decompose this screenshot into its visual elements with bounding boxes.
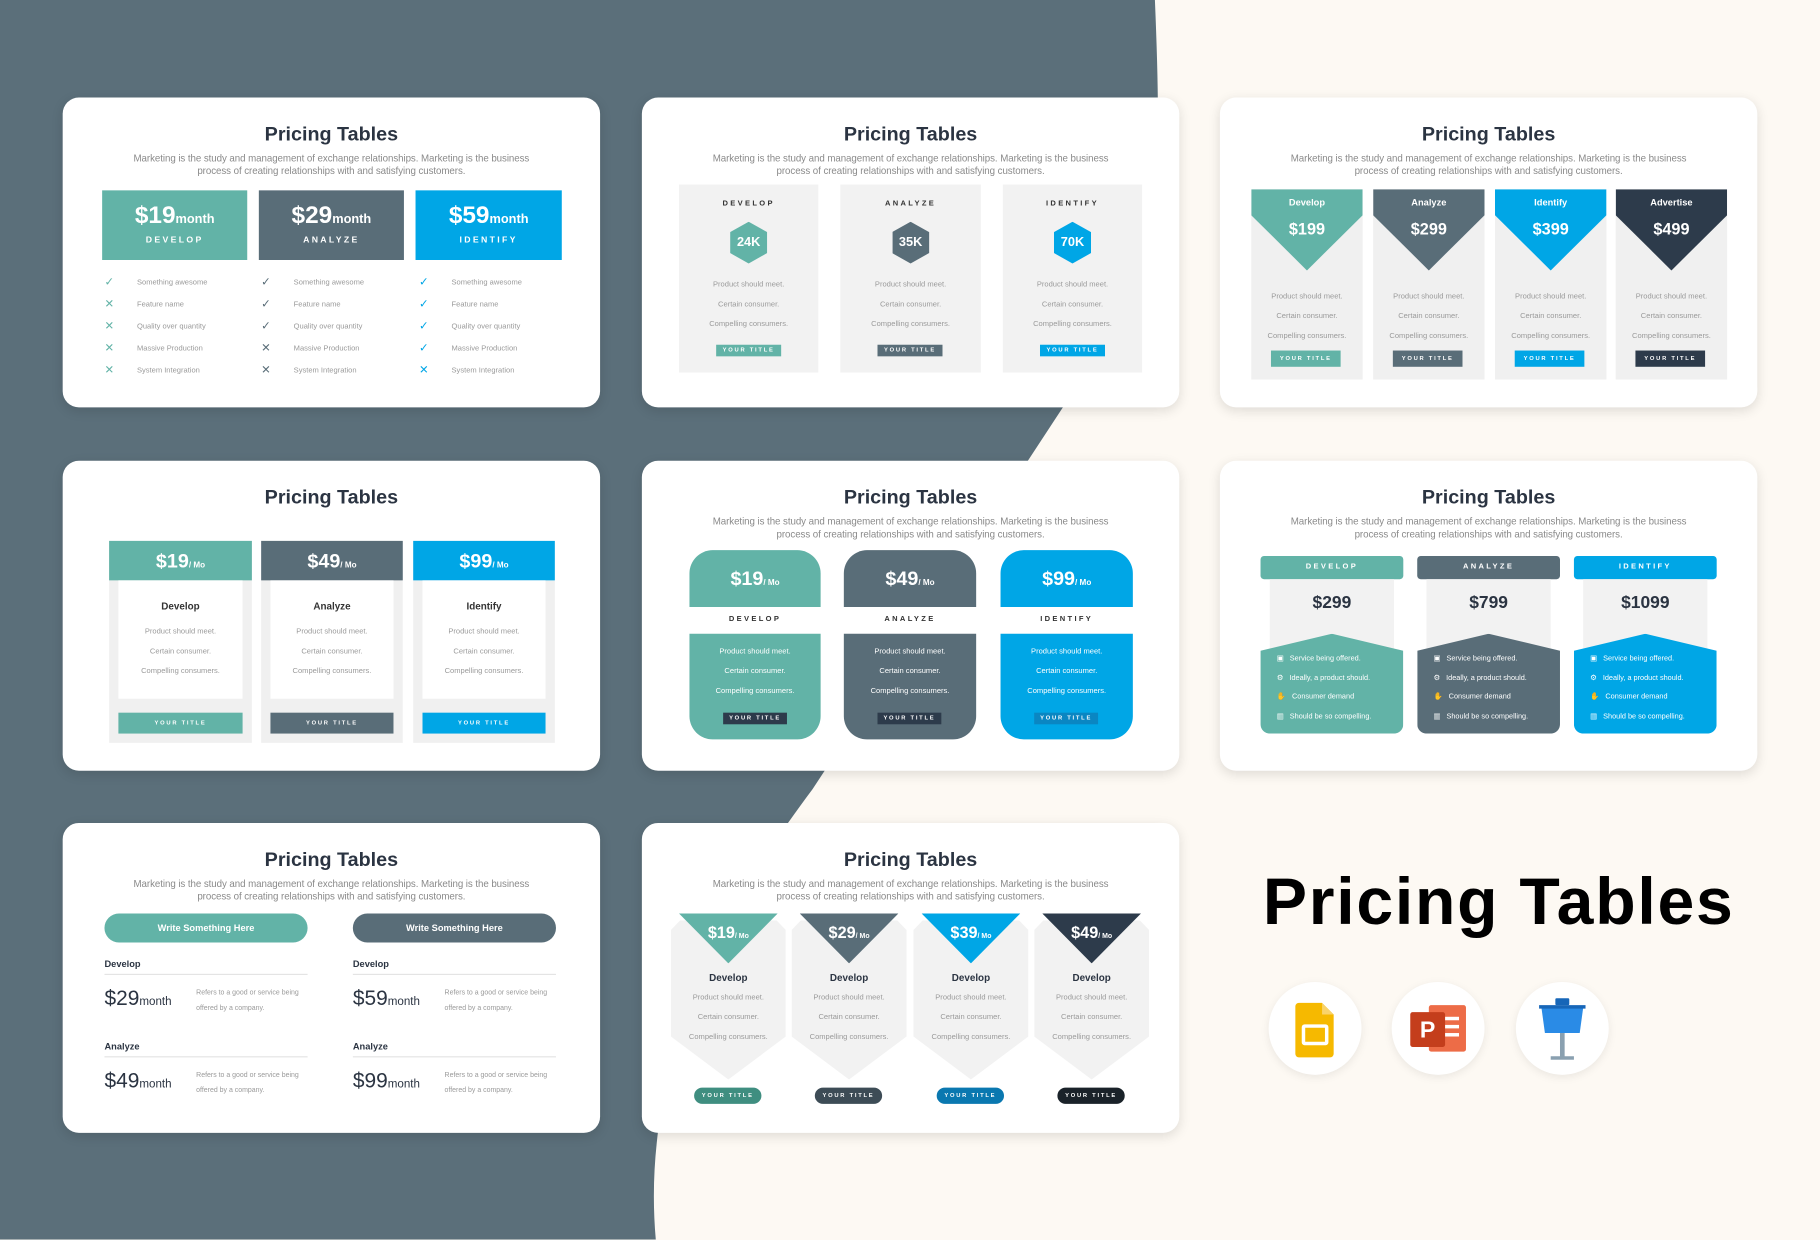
- subtitle: Marketing is the study and management of exchange relationships. Marketing is the business: [134, 152, 529, 164]
- box develop: [102, 190, 247, 260]
- pill left: Write Something Here: [158, 923, 254, 933]
- column develop: ⚙ Ideally, a product should.: [1277, 674, 1370, 682]
- column 4: Develop: [1072, 972, 1111, 983]
- column develop: Certain consumer.: [724, 667, 786, 676]
- column analyze: [1417, 556, 1560, 734]
- panel: card 1: ✓: [261, 276, 271, 289]
- column develop: Product should meet.: [719, 648, 791, 656]
- panel: card 1: ✕: [104, 298, 114, 311]
- panel: card 7: $99month: [353, 1069, 420, 1092]
- column develop: YOUR TITLE: [723, 347, 775, 354]
- column 4: [1034, 914, 1149, 1104]
- column identify: IDENTIFY: [1046, 200, 1099, 208]
- subtitle: [713, 877, 1108, 902]
- column develop: ▥ Should be so compelling.: [1277, 712, 1371, 720]
- panel: card 1: ✓: [261, 320, 271, 333]
- column advertise: Certain consumer.: [1641, 312, 1702, 320]
- panel: card 7: $29month: [104, 987, 172, 1010]
- subtitle: Marketing is the study and management of exchange relationships. Marketing is the business: [713, 152, 1108, 164]
- column identify: IDENTIFY: [1619, 563, 1672, 571]
- column identify: YOUR TITLE: [1047, 347, 1098, 354]
- panel: card 5: [642, 461, 1179, 771]
- subtitle: Marketing is the study and management of exchange relationships. Marketing is the business: [1291, 152, 1686, 164]
- column analyze: $49/ Mo: [307, 550, 357, 572]
- column develop: $299: [1313, 593, 1351, 613]
- panel: card 7: offered by a company.: [445, 1005, 513, 1012]
- column analyze: ANALYZE: [1463, 563, 1514, 571]
- column analyze: Certain consumer.: [1398, 312, 1459, 320]
- column identify: Compelling consumers.: [1033, 320, 1112, 328]
- column analyze: YOUR TITLE: [884, 347, 936, 354]
- panel: card 1: Feature name: [294, 301, 341, 309]
- subtitle: [713, 515, 1108, 540]
- column develop: [1260, 556, 1404, 734]
- column analyze: YOUR TITLE: [883, 715, 935, 722]
- left list: [104, 959, 308, 1095]
- column develop: Compelling consumers.: [1268, 332, 1346, 340]
- heading: Pricing Tables: [844, 848, 977, 871]
- column 3: $39/ Mo: [950, 923, 991, 941]
- main title: Pricing Tables: [1263, 865, 1735, 939]
- subtitle: process of creating relationships with and satisfying customers.: [1355, 528, 1623, 539]
- panel: card 1: ✓: [419, 276, 429, 289]
- panel: card 1: ✕: [261, 342, 271, 355]
- panel: card 1: Quality over quantity: [137, 323, 206, 331]
- column identify: Compelling consumers.: [1027, 687, 1106, 695]
- column develop: Certain consumer.: [718, 301, 779, 309]
- panel: card 1: Massive Production: [294, 345, 360, 353]
- subtitle: process of creating relationships with and satisfying customers.: [777, 528, 1045, 539]
- column identify: IDENTIFY: [1040, 615, 1093, 623]
- icon: keynote: [1516, 982, 1609, 1075]
- heading: Pricing Tables: [844, 486, 977, 508]
- subtitle: Marketing is the study and management of exchange relationships. Marketing is the business: [713, 877, 1108, 889]
- column analyze: 35K: [899, 236, 922, 250]
- pill right: [353, 913, 556, 942]
- box analyze: [259, 190, 404, 260]
- box identify: [416, 190, 562, 260]
- column identify: Certain consumer.: [1520, 312, 1581, 320]
- column analyze: ANALYZE: [885, 200, 936, 208]
- column develop: Product should meet.: [1271, 292, 1343, 301]
- column analyze: Certain consumer.: [301, 648, 363, 656]
- panel: card 1: Quality over quantity: [294, 323, 362, 331]
- column 1: Compelling consumers.: [689, 1033, 768, 1041]
- column 3: [914, 914, 1028, 1104]
- icon: powerpoint: P: [1420, 1017, 1435, 1043]
- column develop: Product should meet.: [145, 628, 216, 636]
- column 2: Compelling consumers.: [810, 1033, 888, 1041]
- column 1: YOUR TITLE: [702, 1092, 754, 1099]
- column identify: Product should meet.: [1031, 648, 1102, 656]
- column identify: $399: [1533, 219, 1569, 238]
- column advertise: $499: [1653, 219, 1690, 238]
- panel: card 1: Massive Production: [452, 345, 517, 353]
- panel: card 1: System Integration: [137, 367, 200, 375]
- right list: Develop: [353, 959, 389, 969]
- column 4: Compelling consumers.: [1052, 1033, 1131, 1041]
- column advertise: YOUR TITLE: [1644, 355, 1696, 362]
- column develop: [1251, 189, 1363, 380]
- column identify: Certain consumer.: [453, 648, 515, 656]
- column develop: Certain consumer.: [150, 648, 211, 656]
- panel: card 1: ✓: [419, 342, 429, 355]
- column analyze: [844, 550, 976, 740]
- column develop: DEVELOP: [729, 615, 781, 623]
- panel: card 7: Analyze: [353, 1041, 388, 1052]
- column identify: ✋ Consumer demand: [1590, 693, 1668, 701]
- subtitle: [713, 152, 1108, 176]
- column develop: YOUR TITLE: [155, 720, 206, 727]
- column identify: Product should meet.: [448, 628, 520, 636]
- column develop: 24K: [737, 236, 760, 250]
- column analyze: Compelling consumers.: [871, 687, 949, 695]
- panel: card 1: Something awesome: [137, 279, 207, 287]
- right list: [353, 959, 556, 1095]
- icon: powerpoint: [1392, 982, 1485, 1075]
- column 3: YOUR TITLE: [944, 1092, 996, 1099]
- column analyze: ▥ Should be so compelling.: [1433, 712, 1528, 720]
- panel: card 1: ✓: [419, 298, 429, 311]
- column analyze: Product should meet.: [875, 281, 946, 289]
- column identify: [1000, 550, 1133, 740]
- panel: card 8: [642, 823, 1179, 1133]
- column develop: Compelling consumers.: [709, 320, 788, 328]
- panel: card 1: ✓: [261, 298, 271, 311]
- panel: card 7: offered by a company.: [196, 1088, 264, 1095]
- box identify: IDENTIFY: [460, 234, 518, 245]
- column identify: $99/ Mo: [1042, 568, 1091, 590]
- panel: card 4: [63, 461, 600, 771]
- column 3: Product should meet.: [935, 994, 1007, 1002]
- column 2: [792, 914, 906, 1104]
- panel: card 7: Refers to a good or service being: [445, 1072, 547, 1079]
- column identify: [1003, 185, 1142, 373]
- column develop: $19/ Mo: [156, 550, 205, 572]
- column identify: Product should meet.: [1515, 292, 1586, 301]
- panel: card 2: [642, 97, 1179, 407]
- column 2: $29/ Mo: [829, 923, 870, 941]
- subtitle: Marketing is the study and management of exchange relationships. Marketing is the business: [1291, 515, 1686, 527]
- column 1: Product should meet.: [693, 994, 764, 1002]
- panel: card 1: System Integration: [452, 367, 514, 375]
- column identify: Identify: [466, 600, 502, 612]
- subtitle: process of creating relationships with and satisfying customers.: [197, 890, 465, 901]
- subtitle: Marketing is the study and management of exchange relationships. Marketing is the business: [134, 877, 529, 889]
- column develop: Compelling consumers.: [141, 667, 220, 676]
- panel: card 7: Refers to a good or service being: [445, 990, 547, 997]
- column analyze: [1373, 189, 1485, 380]
- column 3: Develop: [952, 972, 990, 983]
- column analyze: Analyze: [313, 600, 351, 612]
- panel: card 7: $49month: [104, 1069, 172, 1092]
- column analyze: Product should meet.: [296, 628, 368, 636]
- column advertise: Advertise: [1650, 197, 1693, 208]
- subtitle: [134, 152, 529, 176]
- column analyze: Analyze: [1411, 197, 1446, 208]
- column analyze: ✋ Consumer demand: [1433, 693, 1511, 701]
- pill left: [104, 913, 308, 942]
- column develop: Compelling consumers.: [716, 687, 794, 695]
- column advertise: Product should meet.: [1636, 292, 1707, 301]
- column identify: YOUR TITLE: [1040, 715, 1092, 722]
- icon: google slides: [1269, 982, 1362, 1075]
- subtitle: [134, 877, 529, 902]
- panel: card 1: ✕: [261, 364, 271, 377]
- subtitle: Marketing is the study and management of exchange relationships. Marketing is the business: [713, 515, 1108, 527]
- column develop: DEVELOP: [723, 200, 775, 208]
- column analyze: Product should meet.: [1393, 292, 1464, 301]
- column analyze: Compelling consumers.: [1389, 332, 1468, 340]
- heading: Pricing Tables: [265, 848, 398, 871]
- panel: card 1: ✕: [104, 364, 114, 377]
- panel: card 7: Refers to a good or service being: [196, 990, 299, 997]
- column analyze: $799: [1469, 593, 1508, 613]
- column develop: Develop: [1289, 197, 1325, 208]
- column analyze: YOUR TITLE: [306, 720, 358, 727]
- column develop: $19/ Mo: [730, 568, 780, 590]
- column analyze: YOUR TITLE: [1402, 355, 1454, 362]
- column 1: [671, 914, 786, 1104]
- column identify: [1574, 556, 1717, 734]
- box analyze: $29month: [292, 202, 371, 229]
- column develop: ✋ Consumer demand: [1277, 693, 1354, 701]
- column develop: YOUR TITLE: [1280, 355, 1332, 362]
- panel: card 3: [1220, 97, 1757, 407]
- column develop: Product should meet.: [713, 281, 784, 289]
- column analyze: Certain consumer.: [879, 667, 941, 676]
- column analyze: Certain consumer.: [880, 301, 941, 309]
- heading: Pricing Tables: [1422, 123, 1555, 145]
- subtitle: process of creating relationships with and satisfying customers.: [1355, 164, 1623, 176]
- panel: card 1: Feature name: [137, 301, 184, 309]
- panel: card 7: Analyze: [104, 1041, 140, 1052]
- column develop: DEVELOP: [1306, 563, 1358, 571]
- column identify: YOUR TITLE: [458, 720, 510, 727]
- heading: Pricing Tables: [1422, 486, 1555, 508]
- column identify: 70K: [1061, 236, 1084, 250]
- column identify: [1495, 189, 1606, 380]
- column 2: YOUR TITLE: [823, 1092, 874, 1099]
- column identify: Identify: [1534, 197, 1567, 208]
- column analyze: ⚙ Ideally, a product should.: [1433, 674, 1527, 682]
- pill right: Write Something Here: [406, 923, 503, 933]
- column identify: ⚙ Ideally, a product should.: [1590, 674, 1684, 682]
- column analyze: ▣ Service being offered.: [1433, 655, 1517, 663]
- panel: card 1: ✓: [104, 276, 114, 289]
- column develop: Develop: [161, 600, 200, 612]
- column identify: Certain consumer.: [1042, 301, 1103, 309]
- heading: Pricing Tables: [265, 486, 398, 508]
- subtitle: [1291, 152, 1686, 176]
- column develop: ▣ Service being offered.: [1277, 655, 1361, 663]
- column 1: Certain consumer.: [698, 1013, 759, 1021]
- column analyze: Compelling consumers.: [293, 667, 371, 676]
- column analyze: ANALYZE: [884, 615, 936, 623]
- column develop: $199: [1289, 219, 1325, 238]
- left list: Develop: [104, 959, 141, 969]
- box develop: DEVELOP: [146, 234, 204, 245]
- column 2: Develop: [830, 972, 868, 983]
- column 3: Certain consumer.: [940, 1013, 1002, 1021]
- column 1: Develop: [709, 972, 748, 983]
- feature list: [104, 276, 522, 377]
- panel: card 6: [1220, 461, 1757, 771]
- subtitle: process of creating relationships with and satisfying customers.: [777, 890, 1045, 901]
- column identify: YOUR TITLE: [1524, 355, 1576, 362]
- column analyze: Compelling consumers.: [871, 320, 950, 328]
- column 1: $19/ Mo: [708, 923, 749, 941]
- column analyze: $49/ Mo: [885, 568, 935, 590]
- panel: card 7: offered by a company.: [445, 1088, 513, 1095]
- column identify: $1099: [1621, 593, 1670, 613]
- box analyze: ANALYZE: [303, 234, 360, 245]
- column analyze: $299: [1411, 219, 1447, 238]
- panel: card 1: Something awesome: [452, 279, 522, 287]
- panel: card 7: offered by a company.: [196, 1005, 264, 1012]
- column identify: Compelling consumers.: [1511, 332, 1590, 340]
- panel: card 7: [63, 823, 600, 1133]
- column 4: Certain consumer.: [1061, 1013, 1122, 1021]
- column analyze: Product should meet.: [874, 648, 946, 656]
- panel: card 1: [63, 97, 600, 407]
- subtitle: process of creating relationships with and satisfying customers.: [777, 164, 1045, 176]
- column develop: [679, 185, 818, 373]
- panel: card 1: Feature name: [452, 301, 498, 309]
- column 4: Product should meet.: [1056, 994, 1127, 1002]
- column identify: [413, 541, 555, 743]
- column develop: YOUR TITLE: [729, 715, 781, 722]
- panel: card 1: ✕: [104, 342, 114, 355]
- column identify: $99/ Mo: [459, 550, 509, 572]
- panel: card 1: ✕: [104, 320, 114, 333]
- panel: card 1: ✕: [419, 364, 429, 377]
- column 3: Compelling consumers.: [932, 1033, 1010, 1041]
- column develop: [109, 541, 252, 743]
- box identify: $59month: [449, 202, 529, 229]
- column 2: Certain consumer.: [818, 1013, 880, 1021]
- panel: card 1: Quality over quantity: [452, 323, 520, 331]
- column identify: Certain consumer.: [1036, 667, 1097, 676]
- panel: card 7: $59month: [353, 987, 420, 1010]
- panel: card 7: Refers to a good or service being: [196, 1072, 299, 1079]
- column 2: Product should meet.: [813, 994, 885, 1002]
- heading: Pricing Tables: [265, 123, 398, 145]
- column advertise: [1616, 189, 1727, 380]
- column identify: Product should meet.: [1037, 281, 1108, 289]
- panel: card 1: ✓: [419, 320, 429, 333]
- column 4: YOUR TITLE: [1065, 1092, 1117, 1099]
- panel: card 1: Massive Production: [137, 345, 203, 353]
- column develop: Certain consumer.: [1276, 312, 1338, 320]
- column analyze: [840, 185, 981, 373]
- column identify: ▣ Service being offered.: [1590, 655, 1674, 663]
- box develop: $19month: [135, 202, 215, 229]
- subtitle: [1291, 515, 1686, 540]
- column identify: ▥ Should be so compelling.: [1590, 712, 1685, 720]
- panel: card 1: Something awesome: [294, 279, 364, 287]
- panel: card 1: System Integration: [294, 367, 357, 375]
- column advertise: Compelling consumers.: [1632, 332, 1711, 340]
- subtitle: process of creating relationships with and satisfying customers.: [197, 164, 465, 176]
- column develop: [689, 550, 821, 740]
- column analyze: [261, 541, 403, 743]
- column 4: $49/ Mo: [1071, 923, 1112, 941]
- heading: Pricing Tables: [844, 123, 977, 145]
- column identify: Compelling consumers.: [445, 667, 523, 676]
